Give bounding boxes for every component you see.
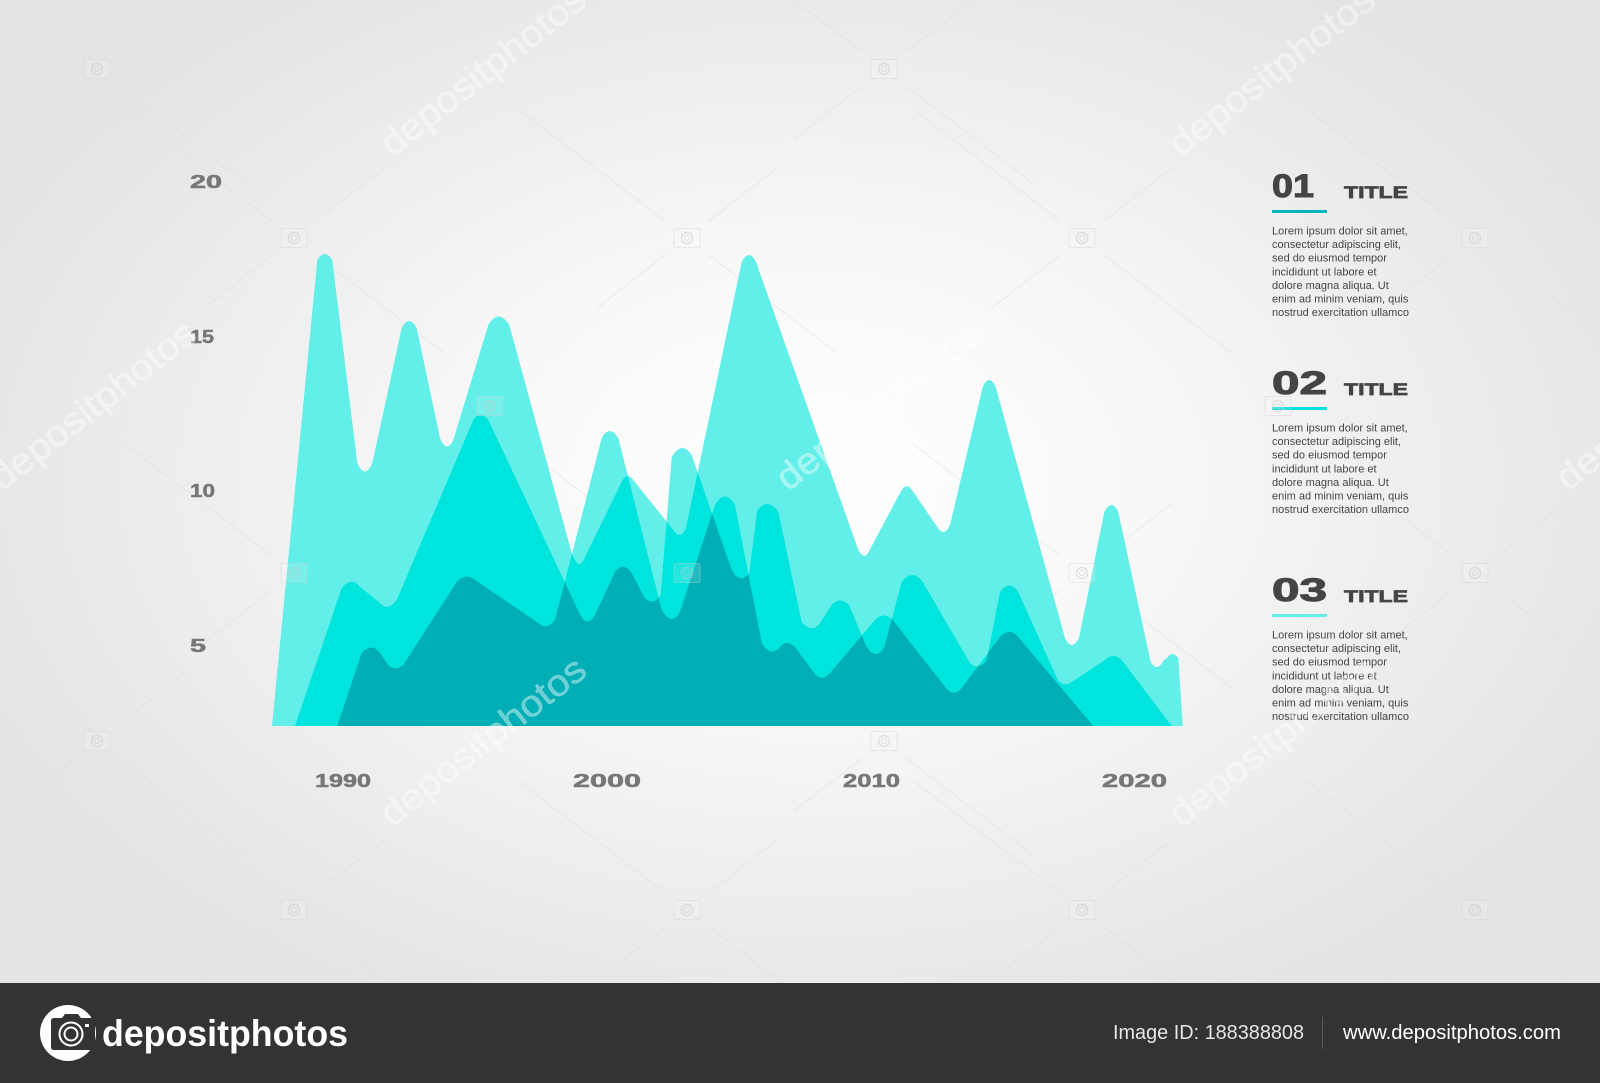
body text: nostrud exercitation ullamco [1272, 307, 1409, 319]
series 2 middle area [295, 415, 1172, 726]
y axis labels [190, 172, 222, 656]
body text: enim ad minim veniam, quis [1272, 294, 1409, 306]
body text: Lorem ipsum dolor sit amet, [1272, 422, 1408, 434]
legend block 03 [1272, 572, 1409, 723]
body text: dolore magna aliqua. Ut [1272, 684, 1389, 696]
number 01: 01 [1272, 168, 1314, 204]
image id: Image ID: 188388808 [1113, 1022, 1304, 1044]
footer bar [0, 983, 1600, 1083]
y axis labels: 20 [190, 172, 222, 192]
accent bar [1272, 210, 1327, 213]
body text: sed do eiusmod tempor [1272, 656, 1387, 668]
body text: enim ad minim veniam, quis [1272, 490, 1409, 502]
website: www.depositphotos.com [1342, 1022, 1561, 1044]
body text: incididunt ut labore et [1272, 464, 1377, 476]
title: TITLE [1344, 380, 1408, 399]
overlap of three series [337, 514, 1094, 726]
body text: dolore magna aliqua. Ut [1272, 477, 1389, 489]
y axis labels: 10 [190, 481, 215, 501]
x axis labels: 1990 [315, 771, 371, 791]
x axis labels: 2010 [843, 771, 900, 791]
body text: dolore magna aliqua. Ut [1272, 280, 1389, 292]
watermark text: depositphotos [1161, 648, 1383, 834]
body text: incididunt ut labore et [1272, 670, 1377, 682]
y axis labels: 15 [190, 327, 214, 347]
body text: Lorem ipsum dolor sit amet, [1272, 630, 1408, 642]
body text: Lorem ipsum dolor sit amet, [1272, 226, 1408, 238]
legend block 01 [1272, 168, 1409, 319]
body text: consectetur adipiscing elit, [1272, 643, 1401, 655]
watermark text [0, 0, 1600, 834]
accent bar [1272, 614, 1327, 617]
icon: camera logo [40, 1005, 96, 1061]
body text: consectetur adipiscing elit, [1272, 239, 1401, 251]
series 1 back area [272, 254, 1183, 726]
body text: sed do eiusmod tempor [1272, 450, 1387, 462]
watermark text: depositphotos [372, 648, 594, 834]
separator [1322, 1017, 1323, 1049]
number 02: 02 [1272, 365, 1327, 401]
body text: enim ad minim veniam, quis [1272, 698, 1409, 710]
number 03: 03 [1272, 572, 1327, 608]
overlap of two series [295, 415, 1172, 726]
area chart [272, 254, 1183, 726]
x axis labels [315, 771, 1167, 791]
title: TITLE [1344, 587, 1408, 606]
body text: nostrud exercitation ullamco [1272, 504, 1409, 516]
logo wordmark: depositphotos [102, 1013, 348, 1054]
accent bar [1272, 407, 1327, 410]
y axis labels: 5 [190, 636, 206, 656]
x axis labels: 2000 [573, 771, 641, 791]
legend block 02 [1272, 365, 1409, 516]
watermark camera icons [84, 60, 1488, 920]
x axis labels: 2020 [1102, 771, 1167, 791]
series 3 front area [337, 431, 1093, 726]
watermark text: depositphotos [768, 312, 990, 498]
body text: incididunt ut labore et [1272, 266, 1377, 278]
title: TITLE [1344, 183, 1408, 202]
body text: consectetur adipiscing elit, [1272, 436, 1401, 448]
body text: nostrud exercitation ullamco [1272, 711, 1409, 723]
body text: sed do eiusmod tempor [1272, 252, 1387, 264]
